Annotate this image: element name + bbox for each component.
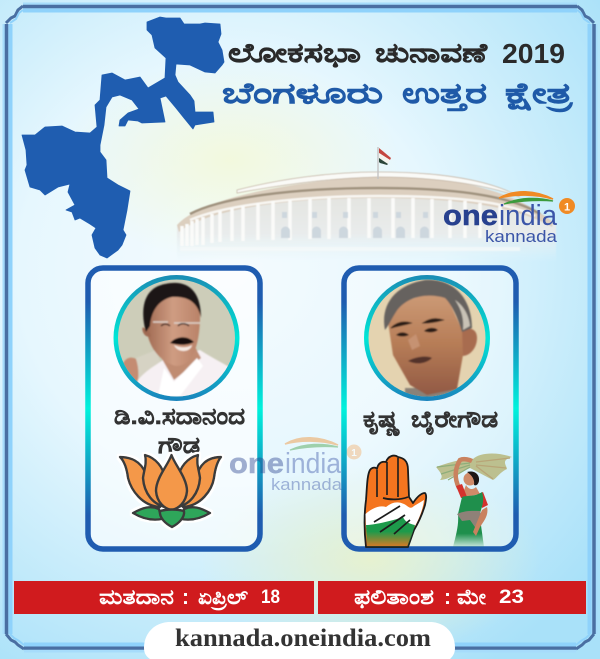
- candidate name: ಗೌಡ: [158, 432, 200, 458]
- banner: result date: ಫಲಿತಾಂಶ: [354, 586, 435, 609]
- parliament building: [177, 172, 556, 262]
- flag: [378, 147, 391, 179]
- icon: JD(S) woman with paddy sheaf: [436, 453, 512, 547]
- banner: polling date: [14, 581, 314, 614]
- map of Bengaluru North constituency: [22, 17, 224, 258]
- title: [222, 38, 573, 112]
- watermark logo: india: [285, 448, 342, 480]
- watermark logo: one: [229, 448, 284, 480]
- banner: result date: ಮೇ: [457, 586, 487, 609]
- oneindia logo: 1: [564, 202, 570, 214]
- oneindia logo: kannada: [485, 227, 558, 246]
- website pill: [144, 622, 455, 659]
- title: ಚುನಾವಣೆ: [375, 38, 488, 68]
- oneindia logo: [443, 192, 575, 246]
- candidate name: ಡಿ.ವಿ.ಸದಾನಂದ: [114, 403, 245, 429]
- title: ಕ್ಷೇತ್ರ: [505, 78, 573, 112]
- portrait photo: [364, 275, 490, 401]
- watermark logo: [229, 438, 362, 494]
- title: 2019: [502, 38, 565, 69]
- candidate name: [363, 406, 498, 436]
- website pill: kannada.oneindia.com: [175, 625, 431, 652]
- oneindia logo: one: [443, 200, 498, 232]
- title: ಬೆಂಗಳೂರು: [222, 78, 383, 110]
- candidate name: ಬೈರೇಗೌಡ: [411, 406, 498, 436]
- panel: candidate D.V. Sadananda Gowda: [88, 268, 260, 549]
- watermark logo: 1: [351, 448, 357, 459]
- oneindia logo: india: [499, 200, 558, 232]
- banner: result date: 23: [499, 587, 524, 608]
- icon: BJP lotus: [120, 455, 221, 547]
- title: ಉತ್ತರ: [402, 78, 487, 112]
- title: ಲೋಕಸಭಾ: [228, 38, 361, 68]
- candidate name: ಕೃಷ್ಣ: [363, 406, 400, 436]
- banner: polling date: 18: [261, 587, 280, 608]
- banner: polling date: :: [182, 586, 189, 609]
- banner: polling date: ಏಪ್ರಿಲ್: [198, 586, 249, 611]
- banner: result date: :: [444, 586, 451, 609]
- banner: polling date: ಮತದಾನ: [99, 586, 174, 609]
- panel: candidate Krishna Byre Gowda: [344, 268, 516, 549]
- card frame: [344, 268, 516, 549]
- card frame: [88, 268, 260, 549]
- banner: result date: [318, 581, 586, 614]
- candidate name: [114, 403, 245, 458]
- portrait photo: [114, 275, 240, 401]
- watermark logo: kannada: [271, 475, 343, 494]
- icon: Congress hand: [364, 456, 426, 547]
